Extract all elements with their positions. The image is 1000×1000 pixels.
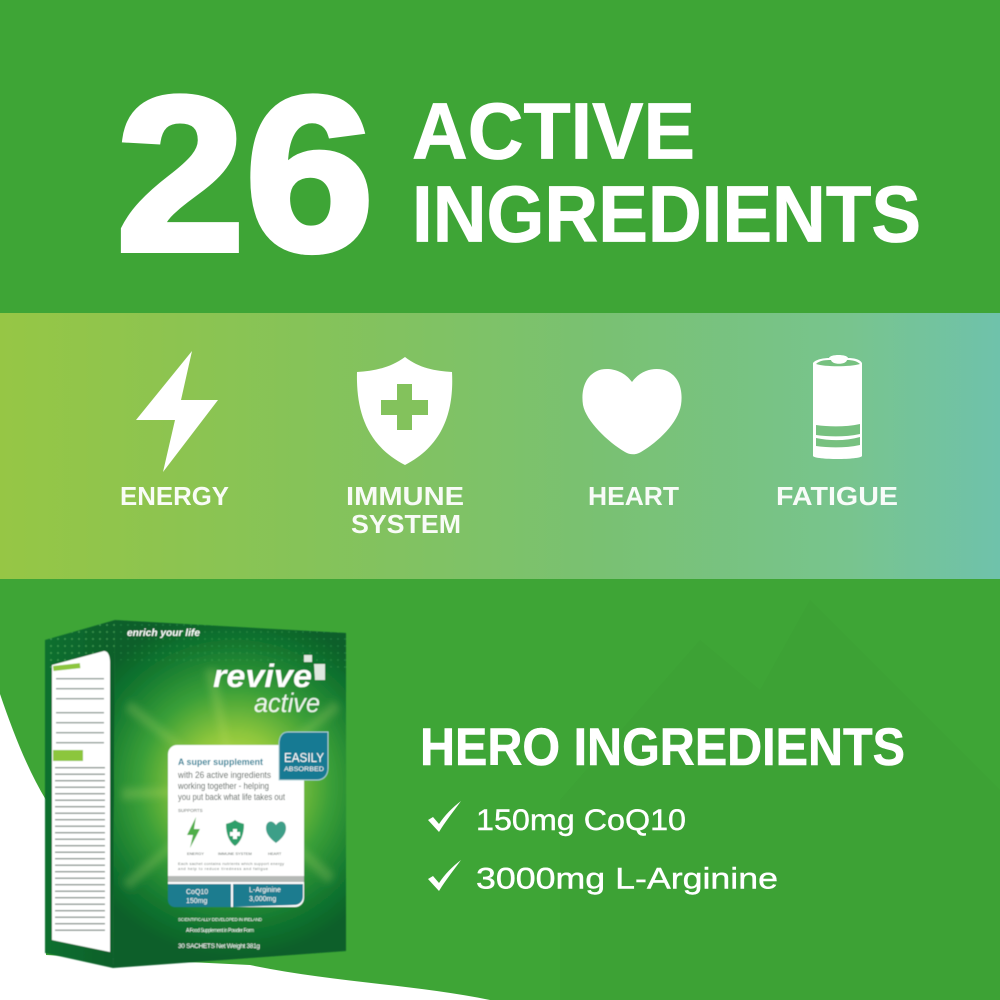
box white label [168,745,304,907]
box ingredient tiles [168,884,303,907]
heading: 26 active ingredients: INGREDIENTS [412,170,921,258]
panel: benefits band: SYSTEM [351,509,461,539]
box front panel [113,620,346,968]
brand logo: revive active: active [254,688,320,718]
icon: shield with cross [357,357,452,465]
box small print: 30 SACHETS Net Weight 381g [178,943,260,950]
icon: lightning bolt [136,351,218,472]
list: hero ingredients [428,801,778,896]
label: energy: ENERGY [120,481,229,511]
box mini icons: IMMUNE SYSTEM [218,851,252,856]
box mini icons [178,817,286,871]
box badge: easily absorbed [279,732,328,780]
box side panel [45,620,115,968]
box ingredient tiles: 150mg [186,898,208,905]
box small print: A Food Supplement in Powder Form [186,928,254,934]
box ingredient tiles: 3,000mg [249,896,276,903]
label: fatigue: FATIGUE [776,481,898,511]
box ingredient tiles: CoQ10 [186,889,208,896]
box tagline: enrich your life [127,627,200,639]
box mini icons: and help to reduce tiredness and fatigue [178,866,269,871]
box small print: SCIENTIFICALLY DEVELOPED IN IRELAND [178,917,263,922]
box description text: A super supplement [178,757,264,768]
box description text: working together - helping [177,781,269,791]
box description text: SUPPORTS [178,808,203,813]
brand logo: revive active [213,655,325,718]
box ingredient tiles: L-Arginine [249,887,281,894]
box description text: with 26 active ingredients [177,770,271,780]
box small print [178,917,263,950]
icon: heart [582,369,682,454]
label: immune system: IMMUNE [346,481,464,511]
heading: 26 active ingredients: 26 [116,51,374,297]
label: heart: HEART [588,481,679,511]
check item: coq10: 150mg CoQ10 [476,804,686,837]
check item: l-arginine [428,860,778,896]
heading: hero ingredients: HERO INGREDIENTS [420,718,905,777]
box badge: easily absorbed: ABSORBED [284,767,325,773]
brand logo: revive active: revive [213,658,312,694]
heading: 26 active ingredients [116,51,921,297]
box mini icons: Each sachet contains nutrients which support energy [178,861,284,866]
box badge: easily absorbed: EASILY [284,751,325,765]
check item: l-arginine: 3000mg L-Arginine [476,862,778,896]
panel: benefits band [0,313,1000,579]
check item: coq10 [428,801,686,837]
icon: battery [813,355,862,459]
box description text: you put back what life takes out [178,792,285,802]
box description text [177,757,285,813]
box mini icons: ENERGY [187,851,204,856]
heading: 26 active ingredients: ACTIVE [412,86,695,176]
product box [45,620,346,968]
box mini icons: HEART [268,851,282,856]
